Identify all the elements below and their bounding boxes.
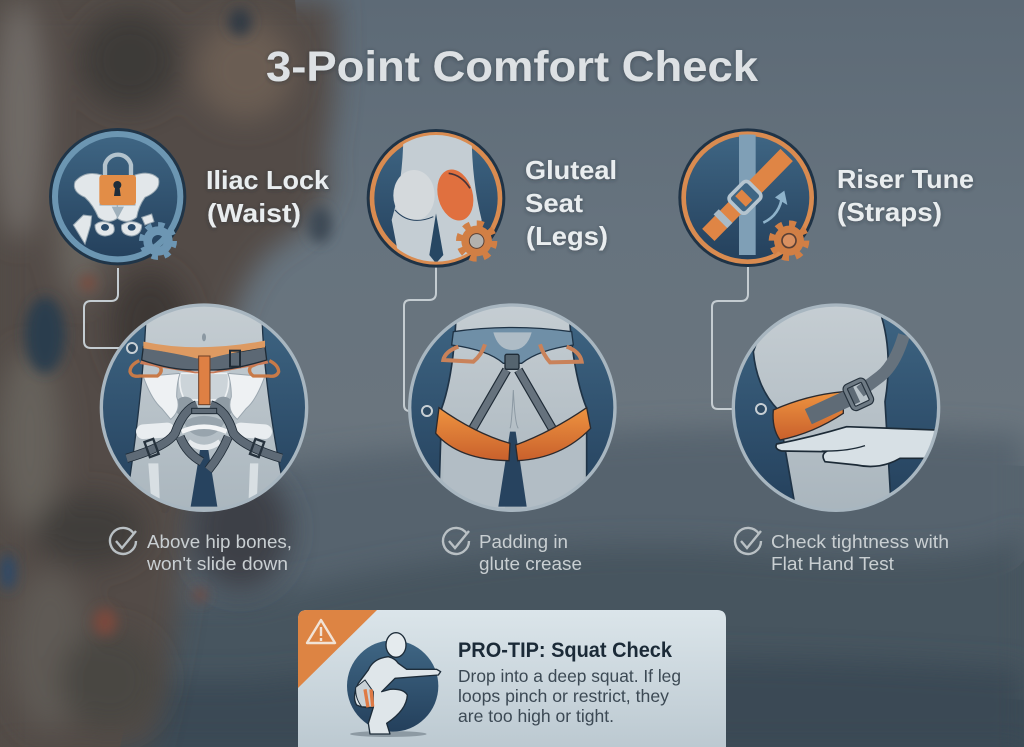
icon: riser tune: [678, 128, 817, 267]
caption 3: [771, 532, 949, 574]
pro-tip body: Drop into a deep squat. If leg: [458, 666, 681, 686]
shoulder strap: [860, 335, 904, 392]
icon part: gear: [142, 225, 174, 257]
icon: gluteal seat: [367, 129, 505, 268]
icon: iliac lock: [49, 128, 186, 265]
caption 3: Check tightness with: [771, 532, 949, 552]
leg loops: [127, 405, 282, 470]
caption 3: Flat Hand Test: [771, 554, 894, 574]
check icon 3: [735, 528, 761, 554]
crotch gap: [191, 450, 217, 507]
connector: gluteal seat: [404, 267, 436, 411]
connector: riser tune: [712, 267, 756, 409]
label: iliac lock: (Waist): [207, 198, 301, 228]
check icon 2: [443, 528, 469, 554]
icon part: padlock: [99, 155, 136, 205]
check icon 1: [110, 528, 136, 554]
label: iliac lock: [206, 165, 330, 228]
icon part: gear: [772, 223, 806, 258]
node: riser tune: [756, 404, 766, 414]
illustration: squat figure: [347, 633, 441, 737]
illustration: gluteal padding: [410, 298, 615, 515]
caption 2: [479, 532, 582, 574]
icon part: gear: [459, 223, 494, 259]
warning corner: [298, 610, 377, 688]
orange leg pads: [436, 408, 510, 461]
caption 1: won't slide down: [146, 554, 288, 574]
caption 1: [146, 532, 292, 574]
caption 2: Padding in: [479, 532, 568, 552]
icon: warning triangle: [307, 620, 335, 643]
Y straps: [470, 370, 555, 433]
label: gluteal seat: Seat: [525, 188, 583, 218]
caption 1: Above hip bones,: [147, 532, 292, 552]
pro-tip body: are too high or tight.: [458, 706, 614, 726]
label: riser tune: [837, 164, 974, 227]
label: gluteal seat: [525, 155, 617, 251]
node: iliac lock: [127, 343, 137, 353]
connector: iliac lock: [84, 268, 127, 348]
pro-tip body: [458, 666, 681, 726]
label: iliac lock: Iliac Lock: [206, 165, 330, 195]
illustration: flat hand test: [733, 298, 939, 515]
waist band: [452, 327, 573, 363]
pro-tip body: loops pinch or restrict, they: [458, 686, 669, 706]
panel: pro-tip: [298, 610, 726, 747]
waist belt: [142, 347, 267, 370]
title: 3-Point Comfort Check: [266, 43, 758, 91]
label: gluteal seat: Gluteal: [525, 155, 617, 185]
label: riser tune: Riser Tune: [837, 164, 974, 194]
crotch gap: [498, 432, 527, 507]
pro-tip heading: PRO-TIP: Squat Check: [458, 639, 672, 662]
centre strap: [199, 356, 210, 405]
label: gluteal seat: (Legs): [526, 221, 608, 251]
gear loops: [130, 361, 161, 376]
icon part: pelvis: [73, 173, 159, 244]
node: gluteal seat: [422, 406, 432, 416]
label: riser tune: (Straps): [837, 197, 942, 227]
hand: [776, 427, 937, 466]
orange pad: [773, 392, 843, 440]
gear loops: [443, 344, 485, 362]
caption 2: glute crease: [479, 554, 582, 574]
illustration: harness on pelvis: [101, 297, 307, 523]
pelvis bones: [143, 373, 265, 507]
